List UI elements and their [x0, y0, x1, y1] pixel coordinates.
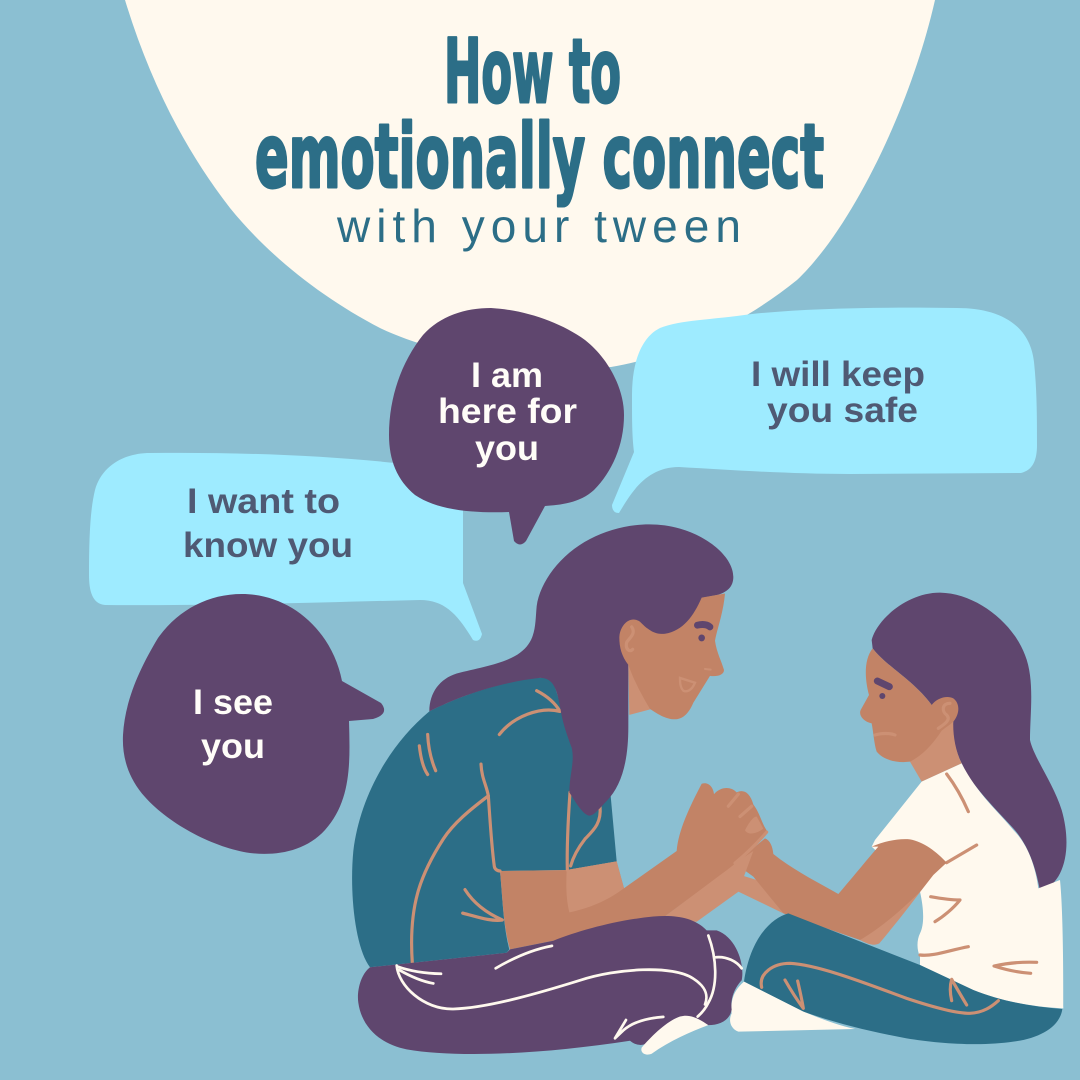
- child near arm: [735, 838, 947, 940]
- parent sock: [641, 1016, 708, 1055]
- speech bubble: I see you: you: [201, 727, 265, 766]
- child far arm: [860, 890, 922, 945]
- speech bubble: I am here for you: I am: [471, 356, 543, 395]
- speech bubble: I see you: I see: [193, 683, 273, 722]
- speech bubble: I am here for you: here for: [438, 392, 577, 431]
- speech bubble: I want to know you: [89, 453, 482, 641]
- child facial features: [875, 681, 950, 735]
- speech bubble: I will keep you safe: I will keep: [751, 355, 925, 394]
- child shirt lines: [920, 774, 1037, 973]
- child trousers: [744, 913, 1062, 1044]
- shirt lines: [412, 691, 600, 963]
- child sock: [730, 982, 855, 1032]
- child trouser lines: [761, 963, 998, 1013]
- speech bubble: I will keep you safe: [612, 308, 1037, 513]
- speech bubble: I want to know you: I want to: [187, 482, 340, 521]
- cream title shape: [125, 0, 935, 368]
- trouser lines: [397, 936, 742, 1038]
- parent teal shirt: [352, 678, 617, 967]
- speech bubble: I want to know you: know you: [183, 526, 353, 565]
- parent trousers: [358, 916, 742, 1054]
- speech bubble: I see you: [123, 594, 384, 854]
- finger details: [728, 794, 767, 863]
- child face: [860, 648, 958, 762]
- title line 1: How to: [444, 20, 621, 123]
- parent hair: [429, 524, 733, 816]
- parent far arm: [660, 851, 753, 922]
- illustration: parent: [352, 524, 767, 1055]
- parent arm and hands: [500, 783, 767, 949]
- parent facial features: [626, 625, 711, 691]
- child hair: [872, 593, 1066, 891]
- arm highlight: [566, 861, 624, 912]
- speech bubble: I will keep you safe: you safe: [767, 391, 918, 430]
- illustration: child: [713, 593, 1066, 1044]
- subtitle: with your tween: [336, 200, 741, 252]
- speech bubble: I am here for you: you: [475, 429, 539, 468]
- parent face: [619, 593, 725, 719]
- parent neck: [628, 658, 652, 715]
- child neck: [910, 720, 962, 782]
- title: [255, 20, 824, 208]
- child white shirt: [872, 763, 1063, 1008]
- far arm shading: [713, 867, 783, 913]
- speech bubble: I am here for you: [389, 308, 624, 544]
